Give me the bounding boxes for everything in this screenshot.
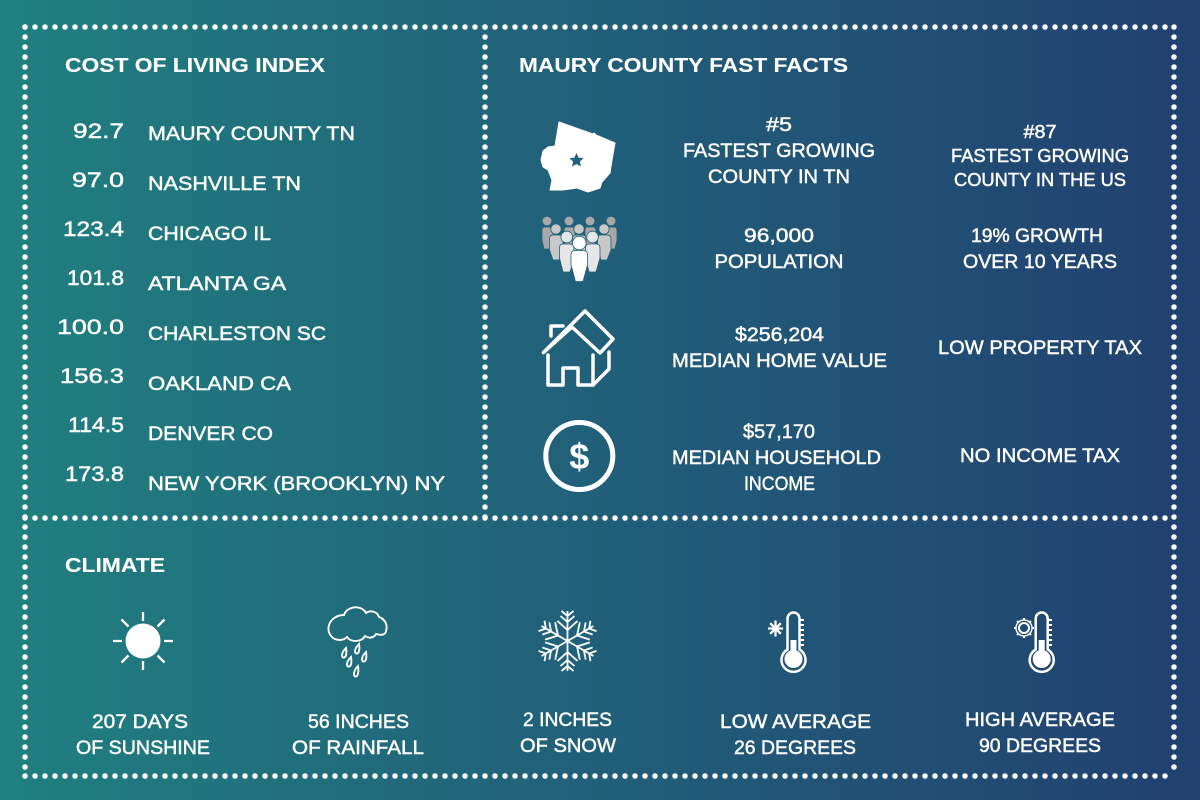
fact: growth	[963, 225, 1117, 273]
list: city names: MAURY COUNTY TN	[148, 123, 355, 145]
icon: snowflake	[537, 611, 598, 671]
stat: high average: HIGH AVERAGE	[965, 709, 1115, 731]
icon: sun	[113, 612, 173, 670]
stat: sunshine: 207 DAYS	[92, 711, 188, 733]
stat: high average	[965, 709, 1115, 757]
fact: #87 fastest growing in US: #87	[1024, 122, 1056, 142]
fact: #5 fastest growing in TN: FASTEST GROWING	[683, 140, 875, 162]
list: index values: 92.7	[73, 120, 124, 143]
fact: no income tax: NO INCOME TAX	[960, 445, 1120, 467]
fact: median household income: MEDIAN HOUSEHOLD	[672, 447, 881, 469]
icon: dollar coin: $	[569, 436, 589, 477]
list: index values: 173.8	[65, 463, 124, 486]
stat: low average	[720, 711, 871, 759]
stat: rainfall: OF RAINFALL	[292, 737, 424, 759]
stat: sunshine	[76, 711, 210, 759]
icon: dollar coin	[546, 422, 613, 490]
fact: median household income: $57,170	[743, 421, 815, 443]
list: city names: ATLANTA GA	[148, 273, 286, 295]
list: city names: OAKLAND CA	[148, 373, 291, 395]
list: city names: CHARLESTON SC	[148, 323, 326, 345]
stat: sunshine: OF SUNSHINE	[76, 737, 210, 759]
list: city names: CHICAGO IL	[148, 223, 271, 245]
list: index values: 123.4	[63, 218, 124, 241]
fact: population: 96,000	[744, 225, 814, 247]
stat: snow: 2 INCHES	[523, 709, 612, 731]
stat: low average: 26 DEGREES	[734, 737, 856, 759]
list: index values	[57, 120, 124, 486]
icon: rain cloud	[328, 607, 387, 677]
icon: cold thermometer	[768, 612, 805, 672]
panel: cost of living index	[57, 55, 445, 495]
list: index values: 100.0	[57, 316, 124, 339]
icon: crowd of people	[542, 216, 617, 282]
stat: snow	[520, 709, 617, 757]
fact: median household income: INCOME	[744, 473, 815, 495]
list: index values: 114.5	[68, 414, 124, 437]
fact: #87 fastest growing in US	[951, 122, 1129, 190]
fact: growth: 19% GROWTH	[971, 225, 1103, 247]
list: city names	[148, 123, 445, 495]
fact: #87 fastest growing in US: FASTEST GROWING	[951, 146, 1129, 166]
list: city names: DENVER CO	[148, 423, 273, 445]
list: city names: NEW YORK (BROOKLYN) NY	[148, 473, 445, 495]
fact: low property tax: LOW PROPERTY TAX	[938, 337, 1142, 359]
fact: #5 fastest growing in TN: COUNTY IN TN	[708, 166, 850, 188]
stat: rainfall	[292, 711, 424, 759]
stat: snow: OF SNOW	[520, 735, 617, 757]
list: index values: 97.0	[72, 169, 124, 192]
fact: population: POPULATION	[714, 251, 844, 273]
stat: rainfall: 56 INCHES	[308, 711, 409, 733]
fact: median home value: $256,204	[735, 324, 824, 346]
icon: county map	[541, 122, 615, 192]
stat: low average: LOW AVERAGE	[720, 711, 871, 733]
fact: #5 fastest growing in TN	[683, 114, 875, 188]
fact: #87 fastest growing in US: COUNTY IN THE US	[954, 170, 1126, 190]
icon: hot thermometer	[1014, 612, 1054, 672]
fact: #5 fastest growing in TN: #5	[766, 114, 792, 136]
fact: median home value: MEDIAN HOME VALUE	[672, 350, 887, 372]
heading: cost of living index: COST OF LIVING INDEX	[65, 55, 326, 77]
heading: climate: CLIMATE	[65, 555, 165, 577]
fact: population	[714, 225, 844, 273]
icon: house	[544, 311, 613, 385]
fact: median household income	[672, 421, 881, 495]
list: index values: 156.3	[60, 365, 124, 388]
fact: growth: OVER 10 YEARS	[963, 251, 1117, 273]
fact: median home value	[672, 324, 887, 372]
list: city names: NASHVILLE TN	[148, 173, 301, 195]
list: index values: 101.8	[67, 267, 124, 290]
heading: fast facts: MAURY COUNTY FAST FACTS	[519, 55, 848, 77]
panel: climate	[65, 555, 1115, 759]
panel: fast facts	[519, 55, 1142, 495]
stat: high average: 90 DEGREES	[979, 735, 1101, 757]
